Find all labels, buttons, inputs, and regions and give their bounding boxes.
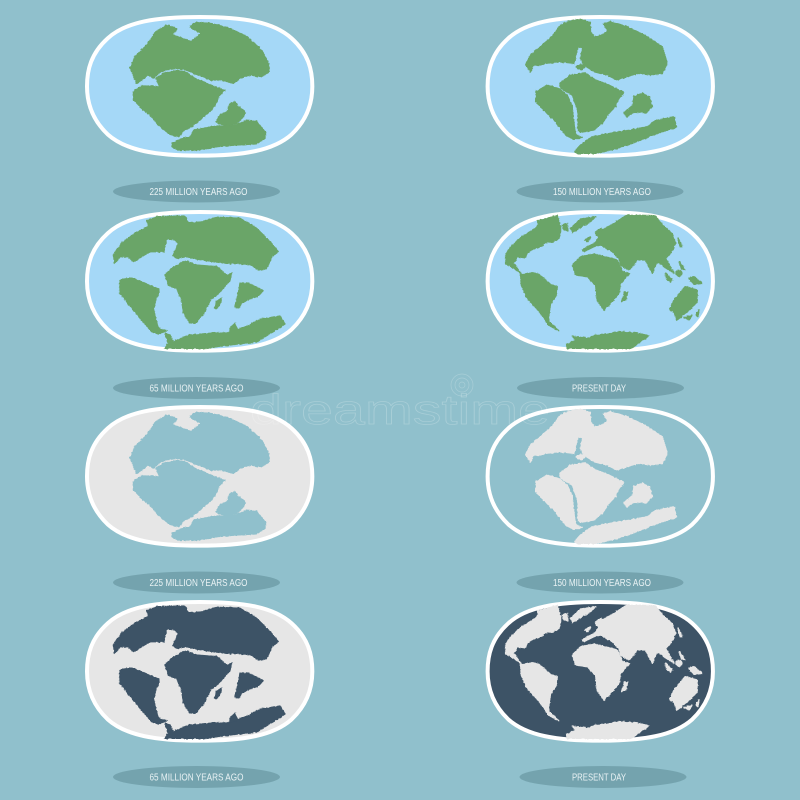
watermark: dreamstime bbox=[250, 386, 550, 433]
label: present day, dark set bbox=[520, 766, 686, 788]
panel: outline map 150 million years ago bbox=[488, 407, 713, 546]
map frame: grey sea bbox=[87, 407, 312, 546]
landmass: dark continents bbox=[113, 606, 285, 738]
panel: green map 65 million years ago bbox=[87, 212, 312, 351]
map frame: dark sea bbox=[488, 602, 713, 741]
label: 65 million years ago bbox=[113, 377, 280, 399]
landmass: grey continents bbox=[526, 409, 677, 543]
map frame: grey sea bbox=[87, 602, 312, 741]
map frame: ocean bbox=[488, 212, 713, 351]
landmass: light modern continents bbox=[506, 605, 702, 738]
landmass: modern continents bbox=[506, 215, 702, 348]
label: 150 million years ago, grey set: 150 MILLION YEARS AGO bbox=[553, 578, 651, 589]
watermark bbox=[250, 374, 550, 433]
label: 150 million years ago bbox=[516, 180, 684, 202]
panel: dark map 65 million years ago bbox=[87, 602, 312, 741]
map frame: ocean bbox=[87, 212, 312, 351]
label: 150 million years ago, grey set bbox=[516, 572, 684, 594]
label: 150 million years ago: 150 MILLION YEARS AGO bbox=[553, 187, 651, 198]
panel: green map present day bbox=[488, 212, 713, 351]
label: 65 million years ago, dark set bbox=[113, 766, 280, 788]
landmass: separating continents bbox=[113, 216, 285, 348]
panel: green map 150 million years ago bbox=[488, 17, 713, 156]
panel: green map 225 million years ago bbox=[87, 17, 312, 156]
label: 225 million years ago, grey set bbox=[113, 572, 280, 594]
map frame: ocean bbox=[488, 17, 713, 156]
landmass: Laurasia and Gondwana bbox=[526, 19, 677, 153]
label: present day, dark set: PRESENT DAY bbox=[572, 772, 626, 783]
label: 225 million years ago: 225 MILLION YEARS AGO bbox=[150, 187, 248, 198]
label: present day: PRESENT DAY bbox=[572, 383, 626, 394]
label: 65 million years ago: 65 MILLION YEARS AGO bbox=[150, 383, 244, 394]
panel: dark map present day bbox=[488, 602, 713, 741]
label: 225 million years ago, grey set: 225 MILLION YEARS AGO bbox=[150, 578, 248, 589]
landmass: Pangaea cut-out bbox=[130, 413, 269, 540]
map frame: outline bbox=[488, 407, 713, 546]
label: 65 million years ago, dark set: 65 MILLION YEARS AGO bbox=[150, 772, 244, 783]
panel: grey map 225 million years ago bbox=[87, 407, 312, 546]
label: 225 million years ago bbox=[113, 180, 280, 202]
label: present day bbox=[517, 377, 684, 399]
map frame: ocean bbox=[87, 17, 312, 156]
landmass: Pangaea bbox=[130, 23, 269, 150]
